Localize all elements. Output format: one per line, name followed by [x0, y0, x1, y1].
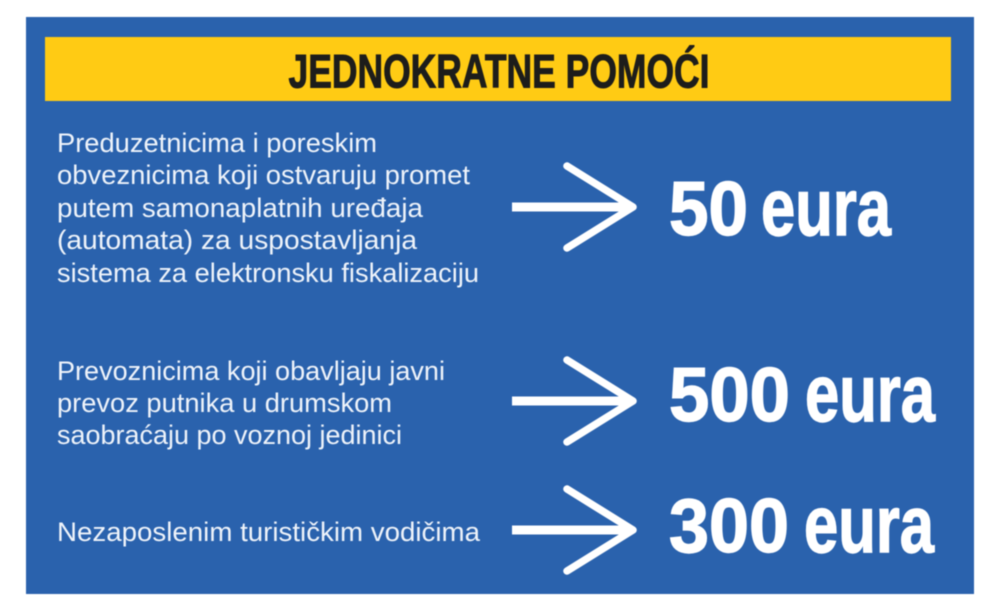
amount: 50 eura: [669, 163, 892, 253]
row 2: road passenger carriers: [57, 349, 936, 450]
arrow: row 2: [512, 360, 633, 442]
amount: 500 eura: 500: [669, 353, 790, 438]
amount: 300 eura: 300: [669, 484, 789, 569]
amount: 500 eura: eura: [805, 349, 936, 439]
arrow: row 3: [512, 489, 633, 571]
amount: 50 eura: eura: [761, 163, 892, 253]
amount: 500 eura: [669, 349, 936, 439]
row 3: unemployed tourist guides: [57, 480, 935, 571]
text: row 1 description: [57, 128, 479, 288]
text: row 3 description: Nezaposlenim turističkim vodičima: [57, 517, 480, 547]
text: row 2 description: saobraćaju po voznoj jedinici: [57, 420, 402, 450]
text: row 1 description: (automata) za uspostavljanja: [57, 225, 417, 255]
text: row 2 description: prevoz putnika u drumskom: [57, 388, 392, 418]
text: row 1 description: putem samonaplatnih uređaja: [57, 193, 423, 223]
amount: 300 eura: eura: [804, 480, 935, 570]
title banner: [45, 37, 951, 101]
title: JEDNOKRATNE POMOĆI: [288, 44, 710, 98]
text: row 2 description: [57, 356, 445, 450]
text: row 1 description: sistema za elektronsku fiskalizaciju: [57, 258, 479, 288]
amount: 50 eura: 50: [669, 167, 748, 252]
text: row 2 description: Prevoznicima koji obavljaju javni: [57, 356, 445, 386]
amount: 300 eura: [669, 480, 935, 570]
row 1: automat operators: [57, 128, 892, 288]
arrow: row 1: [512, 166, 633, 248]
text: row 1 description: Preduzetnicima i poreskim: [57, 128, 377, 158]
text: row 1 description: obveznicima koji ostvaruju promet: [57, 160, 471, 190]
